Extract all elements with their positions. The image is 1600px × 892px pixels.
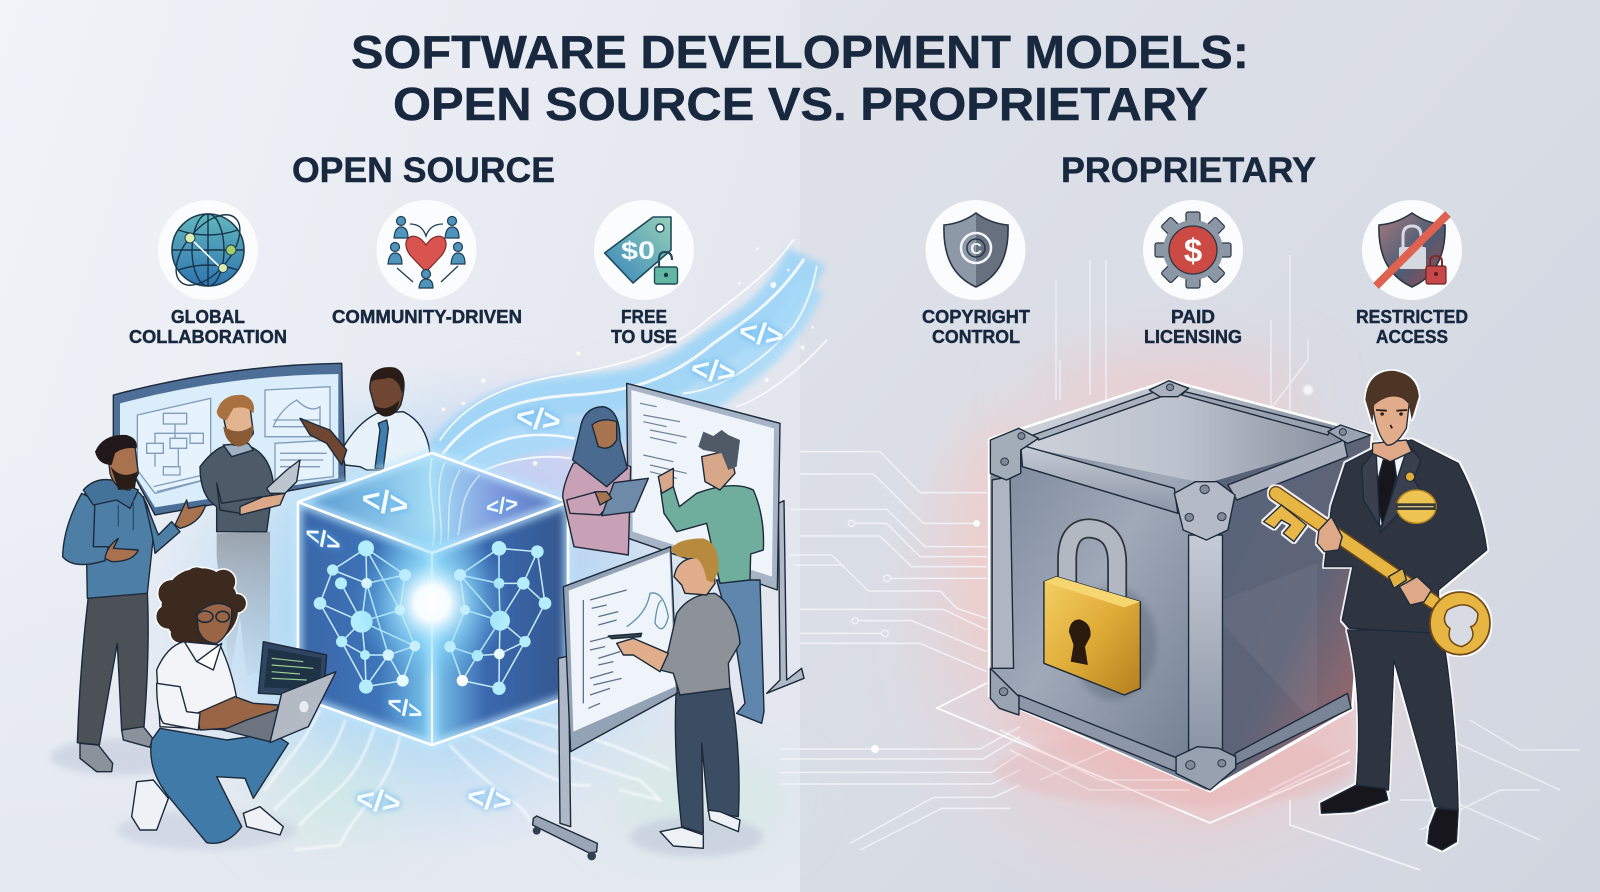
- cube code tags: [306, 480, 518, 728]
- floating code tags: </>: [514, 398, 563, 439]
- cube core star: [354, 525, 510, 681]
- icon: paid licensing: [1143, 200, 1243, 300]
- icon: copyright control: [926, 200, 1026, 300]
- title: OPEN SOURCE VS. PROPRIETARY: [393, 78, 1208, 130]
- vault box: [990, 381, 1371, 807]
- title: SOFTWARE DEVELOPMENT MODELS:: [351, 26, 1249, 78]
- padlock: [1044, 528, 1156, 700]
- network: right face: [444, 541, 551, 695]
- flowing ribbons: [440, 240, 827, 483]
- guard jacket: [1324, 440, 1487, 633]
- icon: copyright control: C: [970, 241, 982, 258]
- icon row: proprietary: [926, 200, 1462, 300]
- cube: glowing code cube: [298, 453, 568, 745]
- floating code tags: </>: [354, 780, 403, 821]
- labels: open source features: COLLABORATION: [129, 326, 287, 347]
- cube code tags: </>: [388, 689, 422, 728]
- labels: open source features: GLOBAL: [171, 306, 245, 327]
- labels: proprietary features: [922, 306, 1468, 347]
- corner brackets: [1149, 381, 1189, 397]
- labels: proprietary features: RESTRICTED: [1356, 306, 1468, 327]
- labels: open source features: FREE: [621, 306, 667, 327]
- person: bearded man with tablet: [200, 395, 300, 677]
- icon row: open source: [158, 200, 694, 300]
- person: man in blue hoodie: [63, 435, 206, 772]
- cube edge glow: [298, 453, 568, 745]
- guard badge: [1396, 490, 1436, 523]
- labels: proprietary features: ACCESS: [1376, 326, 1448, 347]
- circuit lines left of box: [780, 452, 1020, 850]
- title: [351, 26, 1249, 130]
- guard head: [1372, 393, 1409, 445]
- labels: proprietary features: LICENSING: [1144, 326, 1242, 347]
- icon: community-driven: [376, 200, 476, 300]
- glow: energy flow and cube aura: [130, 240, 827, 860]
- person: blond man writing: [608, 538, 740, 848]
- floating code tags: </>: [465, 778, 514, 819]
- network: left face: [314, 540, 420, 694]
- people group: left team behind cube: [50, 363, 430, 850]
- heading: proprietary: PROPRIETARY: [1061, 151, 1316, 190]
- box and guard group: [990, 371, 1490, 850]
- guard legs: [1347, 630, 1458, 810]
- panel: circuit background proprietary: [780, 255, 1580, 892]
- floating code tags: </>: [737, 313, 786, 354]
- person: man in green sweater: [658, 430, 764, 723]
- circuit streams below cube: [265, 710, 670, 850]
- beams: [1021, 445, 1178, 513]
- guard hands and key: [1264, 493, 1490, 655]
- back whiteboard: [627, 383, 804, 693]
- guard holding key: [1264, 371, 1490, 850]
- cube code tags: </>: [486, 491, 518, 520]
- heading: open source: OPEN SOURCE: [292, 151, 555, 190]
- people group: whiteboard team: [533, 383, 804, 860]
- cube code tags: </>: [306, 519, 340, 560]
- icon: global collaboration: [158, 200, 258, 300]
- icon: free to use: $0: [621, 237, 655, 265]
- labels: open source features: [129, 306, 677, 347]
- labels: proprietary features: CONTROL: [932, 326, 1020, 347]
- floating code tags: [354, 313, 786, 821]
- front whiteboard: [533, 547, 677, 860]
- labels: open source features: TO USE: [611, 326, 677, 347]
- icon: restricted access: [1362, 200, 1462, 300]
- monitor with diagrams: [113, 363, 345, 515]
- labels: open source features: COMMUNITY-DRIVEN: [332, 306, 522, 327]
- icon: paid licensing: $: [1184, 232, 1202, 269]
- floating code tags: </>: [689, 350, 738, 391]
- labels: proprietary features: COPYRIGHT: [922, 306, 1031, 327]
- person: woman in hijab: [563, 407, 648, 555]
- person: white shirt pointing: [300, 367, 430, 470]
- icon: free to use: [594, 200, 694, 300]
- cube code tags: </>: [362, 480, 408, 524]
- labels: proprietary features: PAID: [1171, 306, 1215, 327]
- person: woman with laptop: [132, 567, 336, 843]
